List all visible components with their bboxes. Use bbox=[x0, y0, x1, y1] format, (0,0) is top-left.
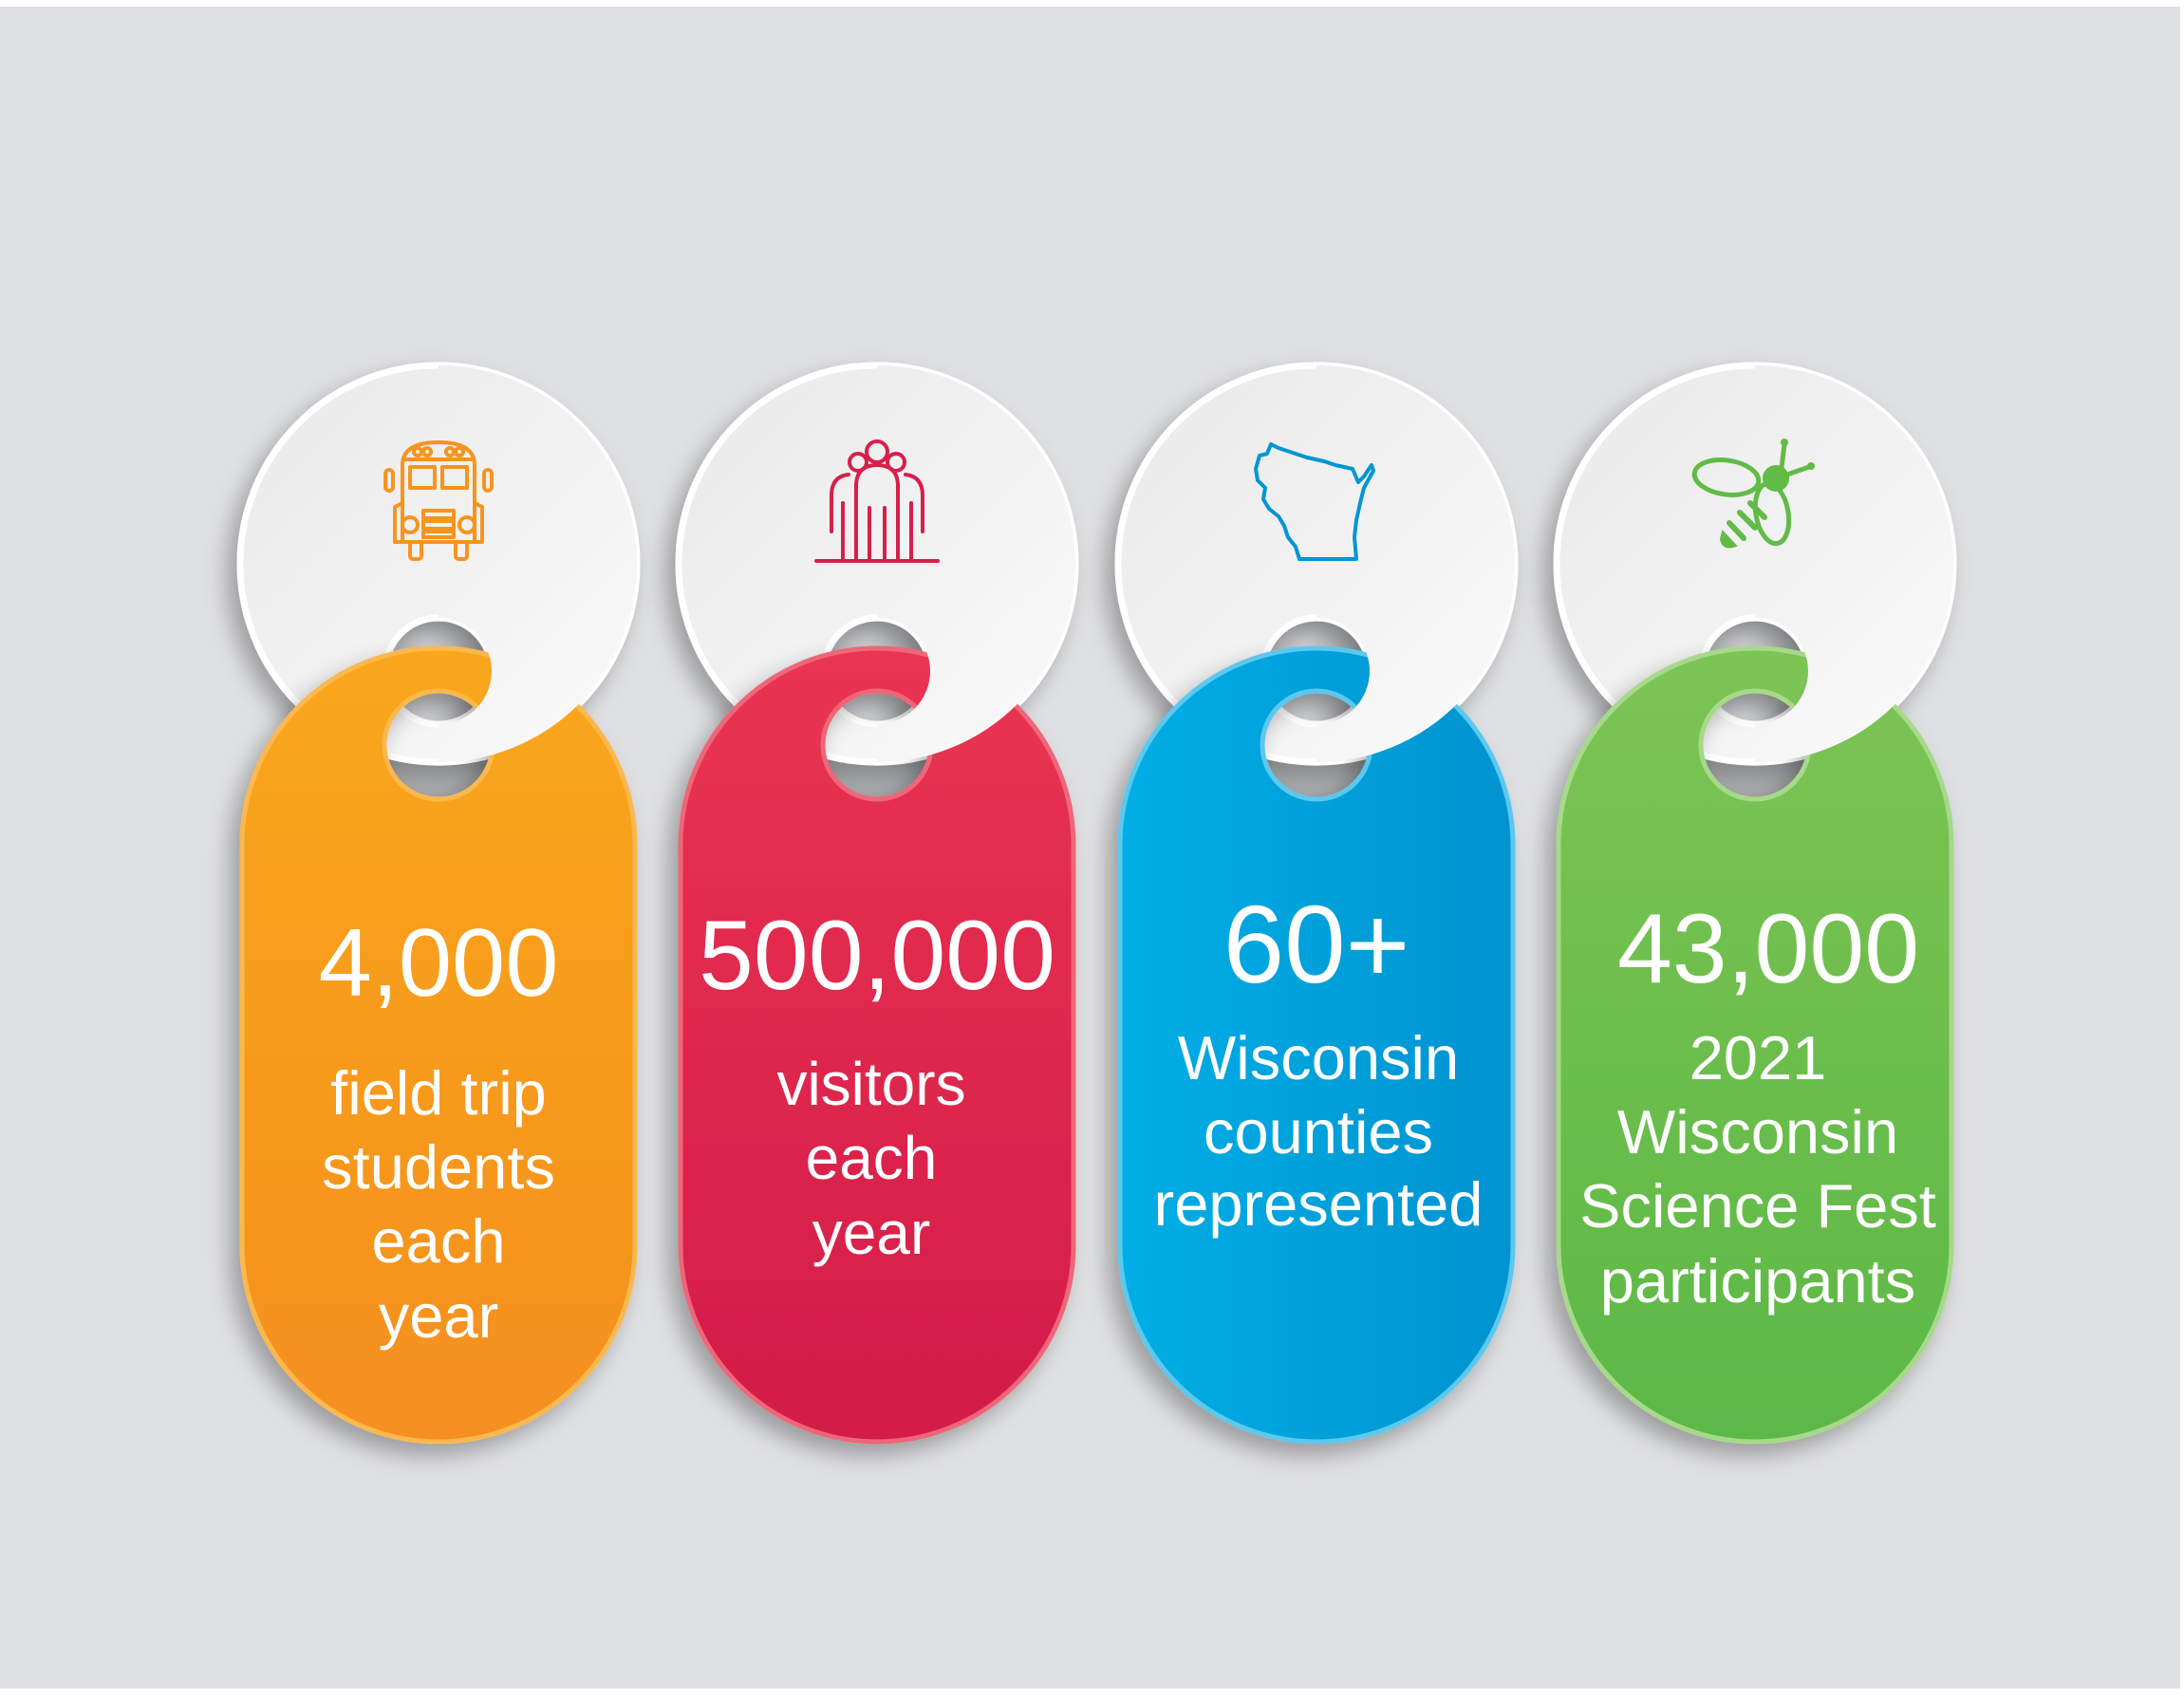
label: 2021 Wisconsin Science Fest participants: 2021 bbox=[1689, 1023, 1826, 1092]
icon: Wisconsin map bbox=[1256, 444, 1373, 559]
icon: school bus bbox=[385, 442, 492, 559]
tag: red visitors bbox=[679, 365, 1075, 1442]
tag: green science fest bbox=[1557, 365, 1953, 1442]
number: 500,000: 500,000 bbox=[699, 901, 1055, 1011]
tag: orange field trip bbox=[240, 365, 637, 1442]
number: 4,000: 4,000 bbox=[319, 910, 558, 1017]
label: field trip students each year: students bbox=[322, 1132, 555, 1202]
label: visitors each year: year bbox=[812, 1199, 930, 1267]
label: visitors each year: visitors bbox=[776, 1050, 966, 1118]
label: 2021 Wisconsin Science Fest participants: Wisconsin bbox=[1617, 1097, 1898, 1166]
icon: bee bbox=[1692, 438, 1815, 547]
label: Wisconsin counties represented: represented bbox=[1154, 1169, 1483, 1239]
label: Wisconsin counties represented: counties bbox=[1204, 1097, 1433, 1166]
label: field trip students each year: year bbox=[379, 1281, 498, 1351]
label: 2021 Wisconsin Science Fest participants: Science Fest bbox=[1579, 1171, 1936, 1241]
label: Wisconsin counties represented: Wisconsin bbox=[1178, 1023, 1459, 1092]
icon: group of people bbox=[816, 441, 938, 561]
label: field trip students each year: each bbox=[372, 1206, 505, 1276]
tag: blue counties bbox=[1118, 365, 1515, 1442]
label: visitors each year: each bbox=[806, 1124, 937, 1192]
label: 2021 Wisconsin Science Fest participants: participants bbox=[1600, 1246, 1915, 1315]
number: 43,000: 43,000 bbox=[1617, 894, 1919, 1004]
number: 60+: 60+ bbox=[1223, 883, 1409, 1006]
label: field trip students each year: field trip bbox=[330, 1058, 547, 1128]
